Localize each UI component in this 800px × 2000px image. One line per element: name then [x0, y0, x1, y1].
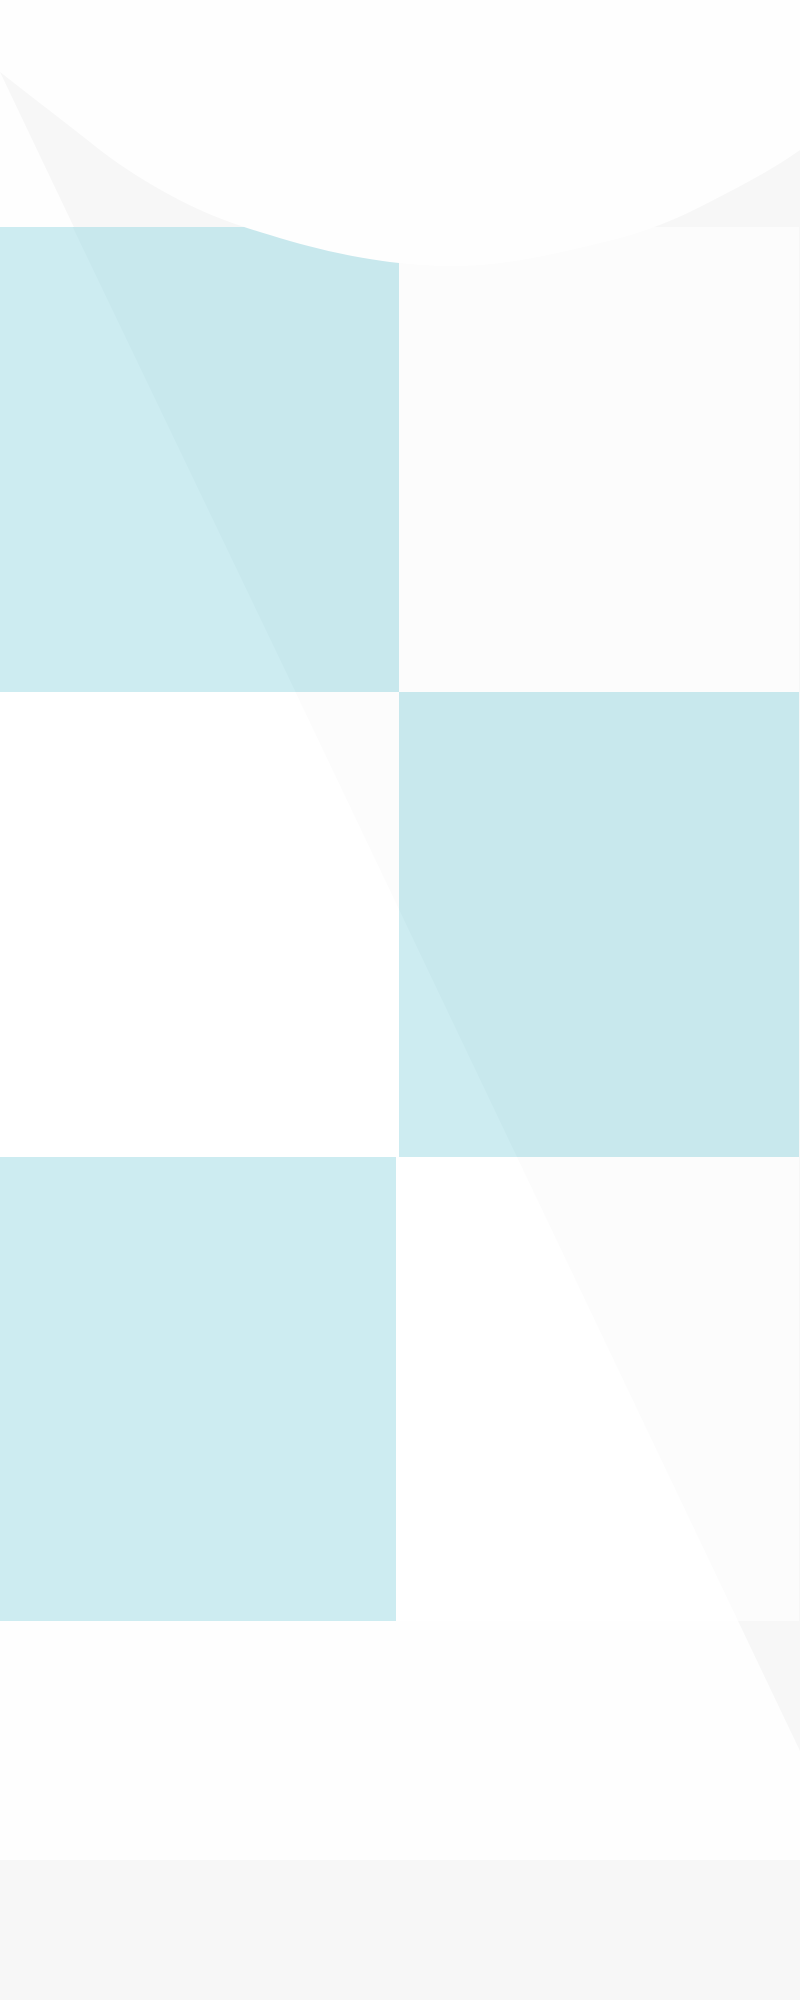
bottom grey band	[0, 1860, 800, 2000]
panel: top left teal	[0, 227, 399, 692]
white curved header shape	[0, 0, 800, 266]
panel: middle right teal	[399, 692, 799, 1157]
panel: top right	[399, 227, 799, 692]
panel: lower left teal	[0, 1157, 396, 1621]
panel: lower right	[396, 1157, 799, 1621]
panel: middle left	[0, 692, 399, 1157]
